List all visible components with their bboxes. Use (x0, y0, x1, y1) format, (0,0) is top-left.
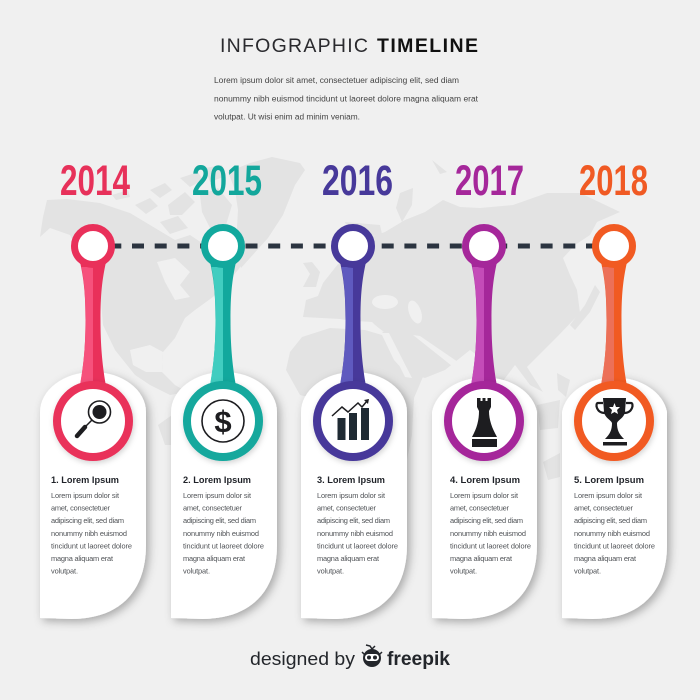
year labels: 2017 (455, 157, 524, 205)
icon: freepik mascot (362, 645, 382, 667)
stem 1 (79, 262, 107, 392)
card text 2: adipiscing elit, sed diam (183, 516, 256, 525)
year labels: 2015 (192, 157, 262, 205)
card text 5 (574, 475, 655, 576)
card text 4: tincidunt ut laoreet dolore (450, 541, 531, 550)
footer credit: designed by (250, 649, 355, 669)
card text 1: adipiscing elit, sed diam (51, 516, 124, 525)
card text 1: nonummy nibh euismod (51, 529, 127, 538)
card shape 3 (301, 372, 407, 619)
card text 2 (183, 475, 264, 576)
card text 5: amet, consectetuer (574, 504, 634, 513)
bottom ring 5 (578, 385, 650, 457)
card shape 4 (432, 377, 537, 619)
card text 3: amet, consectetuer (317, 504, 377, 513)
world map (40, 157, 620, 485)
card text 5: Lorem ipsum dolor sit (574, 491, 642, 500)
card text 4: volutpat. (450, 567, 477, 576)
intro paragraph (214, 76, 479, 122)
top ring 4 (466, 228, 502, 264)
icon: dollar coin (202, 400, 244, 442)
card text 3: Lorem ipsum dolor sit (317, 491, 385, 500)
card text 3: tincidunt ut laoreet dolore (317, 541, 398, 550)
stem highlight 4 (471, 267, 484, 385)
card text 1: tincidunt ut laoreet dolore (51, 541, 132, 550)
card text 2: 2. Lorem Ipsum (183, 475, 251, 486)
stem 4 (470, 262, 498, 392)
bottom ring 1 (57, 385, 129, 457)
icon: chess rook (472, 398, 497, 447)
card text 4: Lorem ipsum dolor sit (450, 491, 518, 500)
card text 5: tincidunt ut laoreet dolore (574, 541, 655, 550)
card text 1: Lorem ipsum dolor sit (51, 491, 119, 500)
card text 1 (51, 475, 132, 576)
card text 4: nonummy nibh euismod (450, 529, 526, 538)
card text 3: magna aliquam erat (317, 554, 379, 563)
card text 3: adipiscing elit, sed diam (317, 516, 390, 525)
bottom ring 2 (187, 385, 259, 457)
card text 2: amet, consectetuer (183, 504, 243, 513)
card text 2: nonummy nibh euismod (183, 529, 259, 538)
top ring 1 (74, 228, 112, 264)
icon: bar chart (332, 399, 369, 440)
card shape 1 (40, 372, 146, 619)
title: INFOGRAPHIC (220, 35, 368, 57)
card text 5: magna aliquam erat (574, 554, 636, 563)
year labels: 2018 (579, 157, 648, 205)
card 4 (432, 228, 537, 619)
card 1 (40, 228, 146, 619)
card text 3 (317, 475, 398, 576)
card 2 (171, 228, 277, 619)
footer credit (250, 645, 450, 670)
icon: trophy (596, 398, 633, 446)
card text 2: magna aliquam erat (183, 554, 245, 563)
intro paragraph: nonummy nibh euismod tincidunt ut laoreet dolore magna aliquam erat (214, 94, 479, 104)
card text 1: amet, consectetuer (51, 504, 111, 513)
card text 4: amet, consectetuer (450, 504, 510, 513)
stem 2 (209, 262, 237, 392)
stem highlight 3 (340, 267, 353, 385)
card text 4: adipiscing elit, sed diam (450, 516, 523, 525)
top ring 3 (334, 228, 372, 264)
year labels: 2016 (322, 157, 393, 205)
year labels: 2014 (60, 157, 130, 205)
bottom ring 4 (448, 385, 520, 457)
card text 1: volutpat. (51, 567, 78, 576)
top ring 2 (204, 228, 242, 264)
card text 1: magna aliquam erat (51, 554, 113, 563)
card text 1: 1. Lorem Ipsum (51, 475, 119, 486)
card text 5: 5. Lorem Ipsum (574, 475, 644, 486)
stem highlight 1 (80, 267, 93, 385)
year labels (60, 157, 648, 205)
card text 4: 4. Lorem Ipsum (450, 475, 520, 486)
stem 5 (600, 262, 628, 392)
card text 5: volutpat. (574, 567, 601, 576)
stem 3 (339, 262, 367, 392)
footer credit: freepik (387, 649, 450, 670)
card text 3: volutpat. (317, 567, 344, 576)
intro paragraph: Lorem ipsum dolor sit amet, consectetuer adipiscing elit, sed diam (214, 76, 459, 85)
intro paragraph: volutpat. Ut wisi enim ad minim veniam. (214, 112, 360, 122)
title: TIMELINE (377, 35, 478, 57)
card 3 (301, 228, 407, 619)
card text 3: nonummy nibh euismod (317, 529, 393, 538)
card text 2: Lorem ipsum dolor sit (183, 491, 251, 500)
card text 3: 3. Lorem Ipsum (317, 475, 385, 486)
card text 2: tincidunt ut laoreet dolore (183, 541, 264, 550)
title (220, 35, 478, 57)
stem highlight 2 (210, 267, 223, 385)
bottom ring 3 (317, 385, 389, 457)
card text 2: volutpat. (183, 567, 210, 576)
stem highlight 5 (601, 267, 614, 385)
card shape 2 (171, 372, 277, 619)
card text 5: adipiscing elit, sed diam (574, 516, 647, 525)
icon: magnifier (77, 401, 110, 436)
icon: dollar coin: $ (214, 404, 232, 439)
card text 5: nonummy nibh euismod (574, 529, 650, 538)
dashed timeline (109, 244, 596, 248)
card shape 5 (562, 377, 667, 619)
top ring 5 (596, 228, 632, 264)
card 5 (562, 228, 667, 619)
card text 4: magna aliquam erat (450, 554, 512, 563)
card text 4 (450, 475, 531, 576)
